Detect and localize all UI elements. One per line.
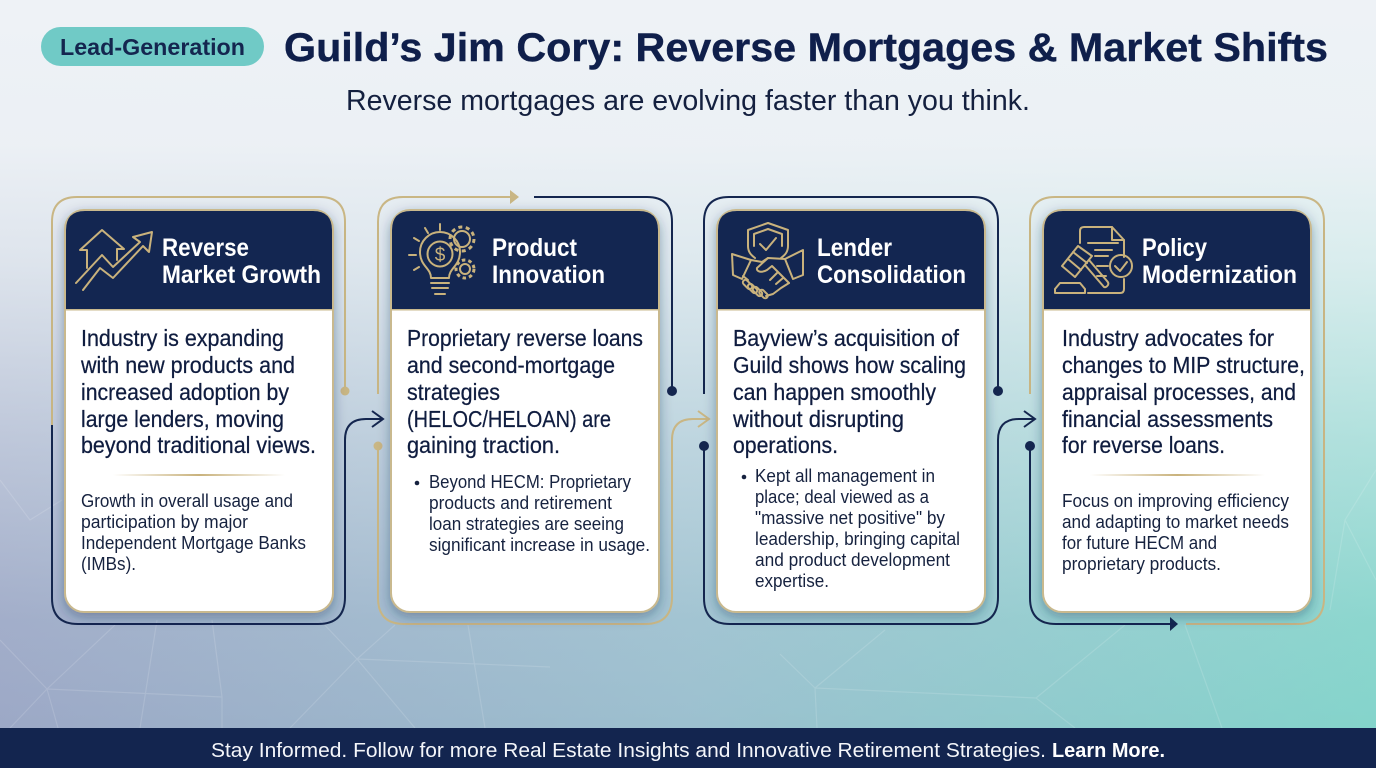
card 1 supporting text: Independent Mortgage Banks [81,533,306,553]
connector: card 3 navy top loop [704,197,1003,396]
card 1 supporting text: Growth in overall usage and [81,491,293,511]
card 2 main text: (HELOC/HELOAN) are [407,406,611,432]
header badge: Lead-Generation: Lead-Generation [60,34,245,60]
card 2 header [392,211,658,309]
card 3 bullet [742,466,960,591]
footer banner: Stay Informed. Follow for more Real Estate Insights and Innovative Retirement Strategies. [211,739,1046,762]
card 3 body [717,210,985,612]
panel: Policy Modernization [1043,210,1311,612]
card 3 heading: Lender [817,234,892,262]
card 2 bullet [415,472,650,555]
header badge: Lead-Generation [41,27,264,66]
icon: shield and handshake [732,223,803,299]
card 2 bullet: significant increase in usage. [429,535,650,555]
card 4 supporting text [1062,491,1289,574]
card 1 header [66,211,332,309]
card 1 supporting text: (IMBs). [81,554,136,574]
card 1 main text: increased adoption by [81,379,289,405]
card 2 heading: Innovation [492,261,605,289]
card 2 body [391,210,659,612]
card 4 main text: appraisal processes, and [1062,379,1296,405]
card 3 bullet: expertise. [755,571,829,591]
card 3 main text: can happen smoothly [733,379,936,405]
card 3 main text [732,325,966,458]
card 2 main text: gaining traction. [407,432,560,458]
subtitle: Reverse mortgages are evolving faster than you think. [346,85,1030,117]
card 3 bullet: place; deal viewed as a [755,487,930,507]
connector: card 1 gold loop [52,197,350,425]
card 2 main text: strategies [407,379,500,405]
connector: card 1 navy arrow to card 2 [52,411,383,624]
card 4 header [1044,211,1310,309]
card 1 main text: large lenders, moving [81,406,284,432]
card 4 heading: Modernization [1142,261,1297,289]
card 3 heading: Consolidation [817,261,966,289]
card 3 bullet: Kept all management in [755,466,935,486]
card 3 main text: Bayview’s acquisition of [733,325,959,351]
card 3 main text: Guild shows how scaling [733,352,966,378]
card 4 main text: for reverse loans. [1062,432,1225,458]
panel: Lender Consolidation [717,210,985,612]
card 3 main text: operations. [733,432,838,458]
card 3 bullet: "massive net positive" by [755,508,945,528]
card 1 main text: beyond traditional views. [81,432,316,458]
icon: lightbulb with dollar and gears [409,224,474,294]
panel: Reverse Market Growth [65,210,333,612]
card 2 bullet: Beyond HECM: Proprietary [429,472,631,492]
card 4 supporting text: Focus on improving efficiency [1062,491,1289,511]
connector: card 3 navy arrow to card 4 [699,411,1035,624]
connector: card 2 gold arrow to card 3 [374,411,709,624]
panel: Product Innovation [391,210,659,612]
card 4 heading [1142,234,1297,289]
title: Guild’s Jim Cory: Reverse Mortgages & Market Shifts [284,26,1328,70]
card 2 main text: Proprietary reverse loans [407,325,643,351]
card 3 header [718,211,984,309]
card 1 heading [162,234,321,289]
card 1 main text: Industry is expanding [81,325,284,351]
card 4 supporting text: for future HECM and [1062,533,1217,553]
connector: card 2 navy right line [534,197,677,396]
card 4 main text: Industry advocates for [1062,325,1274,351]
connector: card 4 gold loop [1030,197,1324,624]
card 4 main text [1062,325,1305,458]
card 1 main text [80,325,316,458]
card 2 main text: and second-mortgage [407,352,615,378]
card 2 heading [492,234,605,289]
icon dollar sign: $ [435,245,446,266]
card 4 supporting text: and adapting to market needs [1062,512,1289,532]
card 1 supporting text [81,491,306,574]
card 3 heading [817,234,966,289]
card 4 heading: Policy [1142,234,1207,262]
card 3 bullet: leadership, bringing capital [755,529,960,549]
card 4 main text: changes to MIP structure, [1062,352,1305,378]
card 1 heading: Reverse [162,234,249,262]
card 1 heading: Market Growth [162,261,321,289]
card 2 bullet: products and retirement [429,493,612,513]
card 2 bullet: loan strategies are seeing [429,514,624,534]
card 2 main text [407,325,643,458]
footer banner [0,728,1376,768]
connector: card 4 navy end arrow [1025,441,1178,631]
card 1 body [65,210,333,612]
icon: house with rising arrow [76,230,152,290]
connector: card 2 gold top arrow [378,190,519,394]
footer banner: Learn More. [1052,739,1165,762]
card 2 heading: Product [492,234,578,262]
icon: document, gavel and check [1055,227,1132,293]
card 1 main text: with new products and [80,352,295,378]
card 3 main text: without disrupting [732,406,904,432]
card 3 bullet: and product development [755,550,950,570]
card 4 body [1043,210,1311,612]
card 1 supporting text: participation by major [81,512,248,532]
card 4 main text: financial assessments [1062,406,1273,432]
card 4 supporting text: proprietary products. [1062,554,1221,574]
